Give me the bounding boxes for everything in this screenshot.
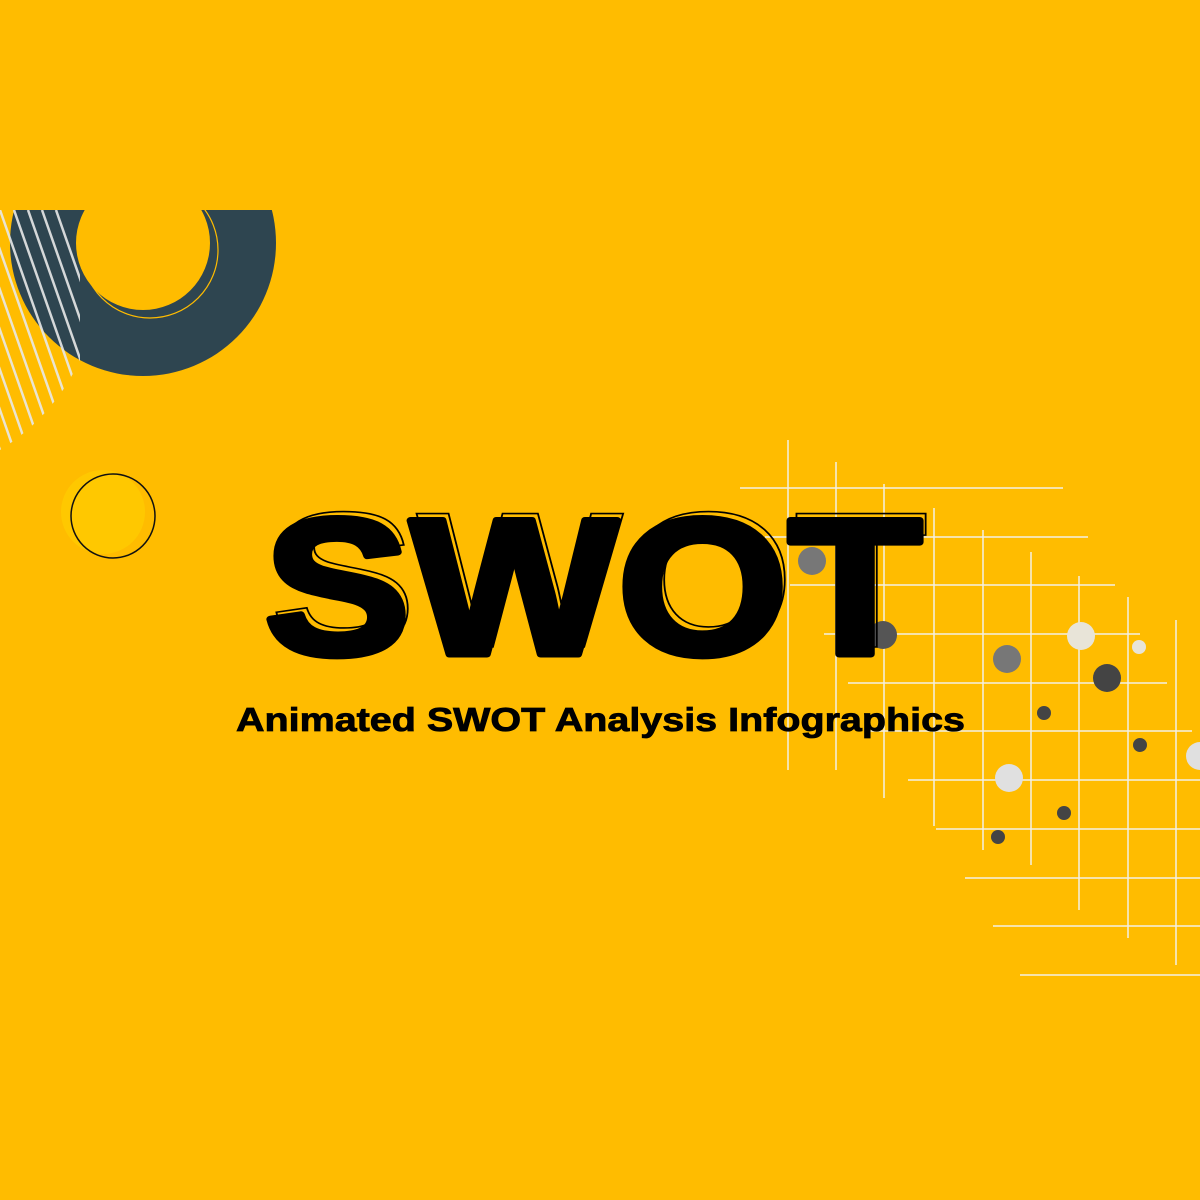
subtitle: Animated SWOT Analysis Infographics <box>236 701 965 738</box>
decorative dots <box>798 547 1200 844</box>
decorative circles left <box>61 470 155 558</box>
decorative ring top-left <box>0 210 276 450</box>
title: SWOT: SWOT <box>270 472 928 689</box>
decorative grid right <box>740 440 1200 975</box>
title: SWOT: SWOT <box>264 479 922 696</box>
